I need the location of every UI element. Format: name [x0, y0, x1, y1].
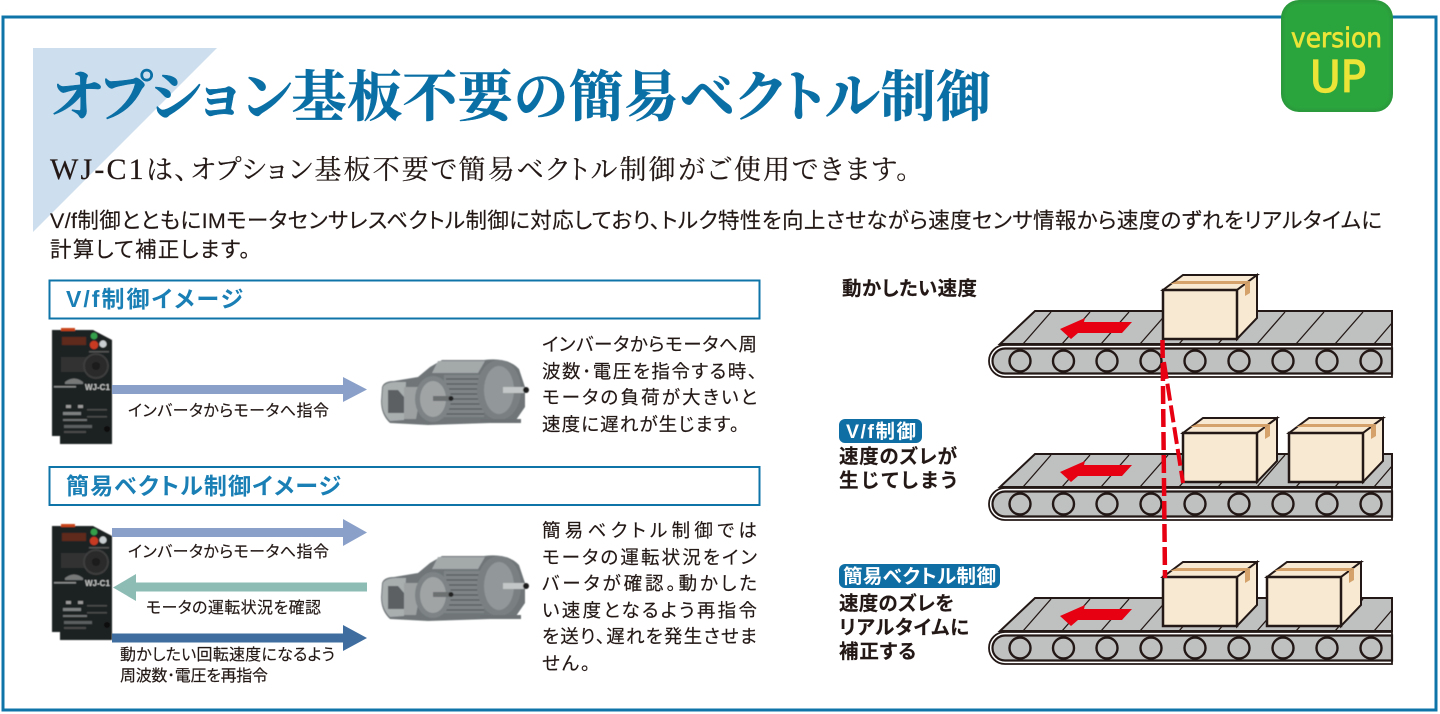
arrow: status back to inverter [113, 574, 367, 601]
description text: V/f制御とともにIMモータセンサレスベクトル制御に対応しており、トルク特性を向上させながら速度センサ情報から速度のずれをリアルタイムに [50, 209, 1382, 233]
arrow: re-command [112, 625, 367, 651]
arrow label: command: インバータからモータへ指令 [128, 543, 329, 561]
heading: simple vector control [50, 467, 760, 505]
label: V/f control delay: V/f制御 [846, 421, 916, 443]
explanation text: い速度となるよう再指令 [542, 600, 757, 621]
decorative triangle [33, 48, 217, 232]
label: simple vector control correction: 簡易ベクトル制御 [843, 565, 996, 588]
label: simple vector control correction [839, 564, 1000, 663]
explanation text: を送り、遅れを発生させま [542, 626, 757, 647]
explanation text: モータの運転状況をイン [542, 547, 758, 568]
label: V/f control delay: 速度のズレが [839, 445, 958, 468]
icon: motor [381, 359, 529, 425]
arrow: inverter to motor [112, 377, 367, 402]
arrow label: re-command: 周波数･電圧を再指令 [120, 667, 268, 685]
icon: inverter [52, 524, 112, 640]
explanation text: モータの負荷が大きいと [542, 387, 757, 408]
label: V/f control delay [839, 419, 958, 492]
icon: motor [381, 555, 529, 621]
subtitle: WJ-C1は、オプション基板不要で簡易ベクトル制御がご使用できます。 [50, 153, 910, 186]
title: オプション基板不要の簡易ベクトル制御 [50, 67, 991, 128]
panel: simple vector control image [50, 467, 760, 685]
icon: inverter [52, 328, 112, 444]
heading: V/f control: V/f制御イメージ [66, 286, 243, 312]
version up badge: version [1291, 23, 1382, 54]
label: simple vector control correction: リアルタイムに [839, 617, 969, 639]
explanation text: 波数･電圧を指令する時、 [542, 361, 757, 382]
heading: simple vector control: 簡易ベクトル制御イメージ [66, 473, 341, 499]
label: target speed: 動かしたい速度 [842, 278, 977, 300]
arrow label: re-command [120, 646, 335, 685]
description text [50, 209, 1382, 262]
conveyor: target speed [989, 275, 1392, 377]
label: simple vector control correction: 補正する [839, 641, 916, 663]
label: V/f control delay: 生じてしまう [839, 470, 957, 492]
explanation text: 速度に遅れが生じます。 [542, 414, 739, 435]
dashed guide lines [1162, 340, 1183, 578]
arrow label: re-command: 動かしたい回転速度になるよう [120, 646, 335, 664]
version up badge: UP [1310, 52, 1366, 103]
arrow: command to motor [112, 519, 367, 546]
version up badge [1281, 0, 1393, 112]
arrow label: status: モータの運転状況を確認 [146, 599, 321, 617]
arrow label: インバータからモータへ指令 [128, 402, 329, 420]
explanation text: せん。 [542, 653, 590, 674]
label: simple vector control correction: 速度のズレを [839, 592, 954, 615]
explanation text: 簡易ベクトル制御では [542, 520, 757, 541]
explanation text: インバータからモータへ周 [542, 334, 757, 355]
heading: V/f control [50, 280, 760, 318]
description text: 計算して補正します。 [50, 238, 250, 262]
conveyor: simple vector control [989, 562, 1392, 664]
explanation text [542, 334, 757, 435]
panel: V/f control image [50, 280, 760, 444]
explanation text [542, 520, 758, 674]
conveyor: V/f control [989, 418, 1392, 520]
explanation text: バータが確認。動かした [542, 573, 757, 594]
